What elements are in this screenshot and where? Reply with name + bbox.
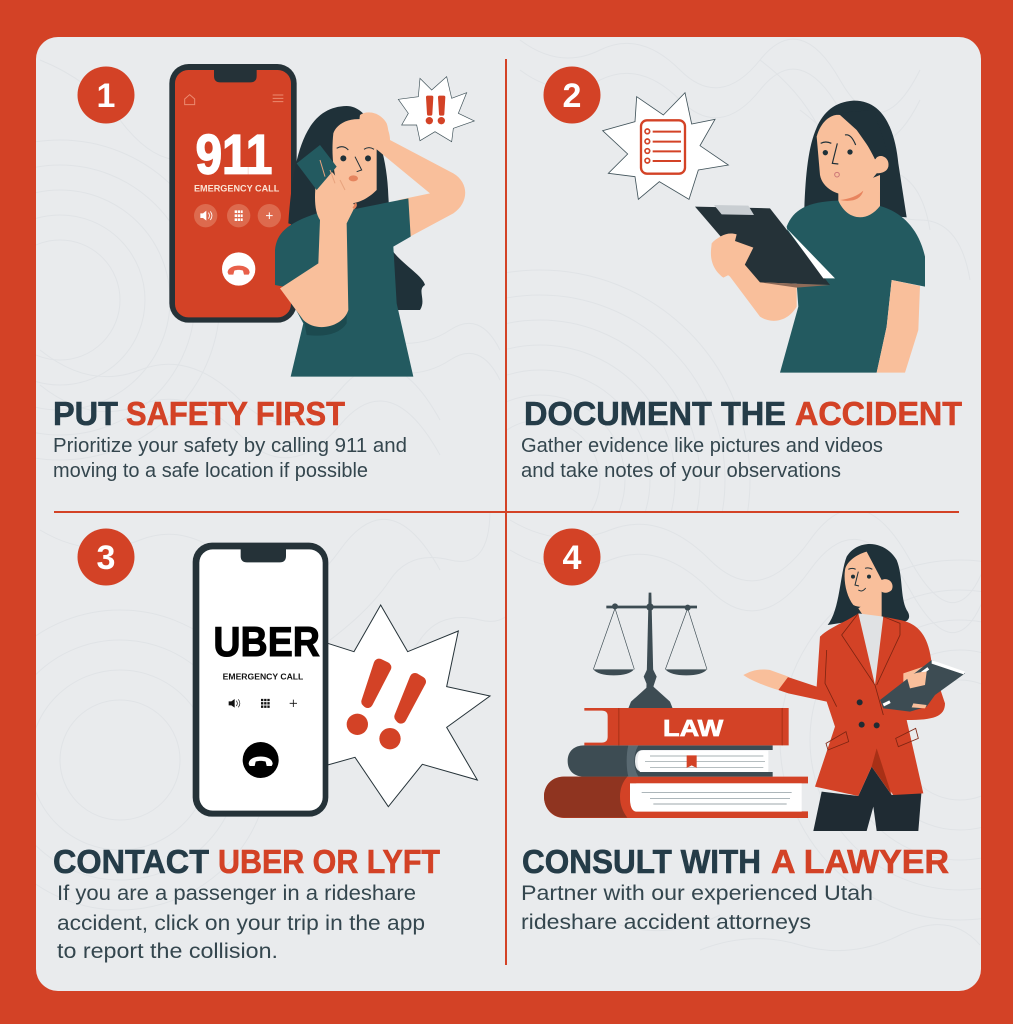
number badge 3 [78, 528, 134, 586]
vertical divider [505, 59, 507, 965]
illustration 4 [544, 544, 965, 831]
body text 2: Gather evidence like pictures and videos [521, 435, 883, 457]
lawyer woman [743, 544, 965, 831]
checklist burst [603, 93, 728, 199]
number badge 4 [544, 528, 600, 586]
number badge 1: 1 [97, 77, 115, 115]
body text 3 [57, 882, 425, 963]
panel 2: document the accident [521, 66, 962, 482]
body text 1 [53, 435, 407, 482]
body text 3: accident, click on your trip in the app [57, 912, 425, 935]
heading 4: CONSULT WITH [522, 843, 761, 880]
body text 4 [521, 882, 873, 934]
woman on phone [275, 106, 465, 377]
heading 4 [522, 843, 949, 880]
illustration 1 [169, 64, 474, 377]
number badge 4: 4 [563, 539, 582, 577]
body text 4: rideshare accident attorneys [521, 911, 811, 934]
heading 3 [53, 843, 440, 880]
number badge 2: 2 [563, 77, 581, 115]
illustration 3 [193, 543, 490, 817]
scales of justice [593, 593, 707, 708]
body text 3: to report the collision. [57, 940, 278, 963]
heading 2: ACCIDENT [795, 395, 962, 432]
phone with Uber: UBER [213, 618, 320, 665]
woman with clipboard [695, 101, 925, 373]
illustration 2 [603, 93, 925, 373]
heading 1: SAFETY FIRST [126, 395, 345, 432]
heading 2: DOCUMENT THE [524, 395, 786, 432]
number badge 3: 3 [97, 539, 115, 577]
phone with Uber [193, 543, 328, 817]
body text 2 [521, 435, 883, 482]
alert burst large [328, 605, 490, 807]
panel 3: contact uber or lyft [53, 528, 490, 963]
horizontal divider [54, 511, 959, 513]
body text 4: Partner with our experienced Utah [521, 882, 873, 905]
heading 3: UBER OR LYFT [218, 843, 440, 880]
alert burst [398, 77, 474, 142]
body text 3: If you are a passenger in a rideshare [57, 882, 416, 905]
panel 1: put safety first [53, 64, 474, 482]
heading 2 [524, 395, 962, 432]
body text 1: moving to a safe location if possible [53, 460, 368, 482]
phone with Uber: EMERGENCY CALL [223, 672, 303, 681]
book stack [544, 708, 808, 818]
phone with 911: 911 [196, 122, 272, 185]
heading 1: PUT [53, 395, 118, 432]
phone with 911 [169, 64, 297, 323]
heading 4: A LAWYER [771, 843, 949, 880]
body text 2: and take notes of your observations [521, 460, 841, 482]
book stack: LAW [663, 715, 724, 741]
phone with 911: EMERGENCY CALL [194, 183, 280, 193]
body text 1: Prioritize your safety by calling 911 and [53, 435, 407, 457]
panel 4: consult with a lawyer [521, 528, 965, 934]
heading 3: CONTACT [53, 843, 209, 880]
number badge 1 [78, 66, 134, 124]
number badge 2 [544, 66, 600, 124]
